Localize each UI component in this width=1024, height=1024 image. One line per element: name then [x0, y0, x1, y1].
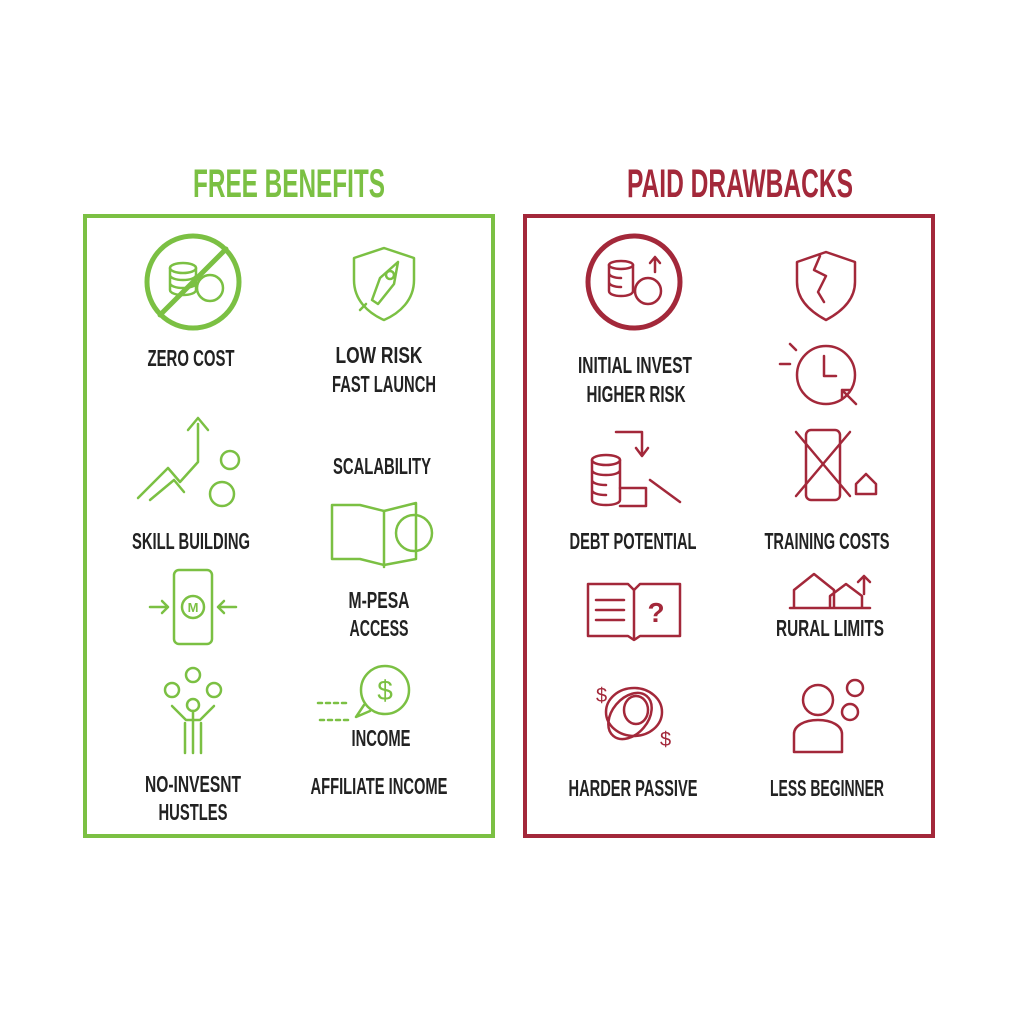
label: affiliate income: AFFILIATE INCOME [310, 773, 448, 799]
icon: juggler [165, 668, 221, 753]
icon: book brain [332, 503, 432, 567]
panel: paid drawbacks: HIGHER RISK [586, 381, 686, 407]
icon: scribble: $ [596, 685, 607, 707]
label: debt potential: DEBT POTENTIAL [570, 528, 696, 554]
panel: free benefits [85, 216, 493, 836]
icon: shield rocket [354, 248, 414, 320]
label: scalability: SCALABILITY [333, 453, 431, 479]
panel: paid drawbacks [525, 216, 933, 836]
panel: free benefits: FAST LAUNCH [332, 371, 436, 397]
label: no-invesnt hustles: NO-INVESNT [145, 771, 241, 797]
icon: scribble: $ [660, 729, 671, 751]
label: m-pesa access: M-PESA [348, 587, 410, 613]
icon: zero cost [147, 236, 239, 328]
icon: cracked shield [797, 252, 855, 320]
icon: initial invest [588, 236, 680, 328]
icon: rural houses [790, 574, 870, 608]
label: initial invest higher risk: INITIAL INVEST [578, 352, 692, 378]
title: free benefits: FREE BENEFITS [193, 162, 385, 206]
label: income: INCOME [352, 725, 410, 751]
icon: book question: ? [647, 597, 665, 628]
icon: scribble [596, 685, 671, 751]
label: rural limits: RURAL LIMITS [776, 615, 884, 641]
icon: debt chain [592, 432, 680, 506]
title: paid drawbacks: PAID DRAWBACKS [627, 162, 853, 206]
panel: free benefits: HUSTLES [158, 799, 228, 825]
panel: free benefits: ACCESS [350, 615, 408, 641]
label: low risk fast launch: LOW RISK [336, 342, 423, 368]
icon: dollar bubble: $ [377, 675, 393, 706]
icon: dollar bubble [318, 666, 409, 720]
icon: book question [588, 584, 680, 640]
label: training costs: TRAINING COSTS [764, 528, 890, 554]
icon: person gears [794, 680, 863, 752]
icon: crossed phone house [796, 430, 876, 500]
icon: clock [780, 344, 856, 404]
label: zero cost: ZERO COST [148, 345, 234, 371]
label: harder passive: HARDER PASSIVE [568, 775, 698, 801]
icon: phone M [150, 570, 236, 644]
label: less beginner: LESS BEGINNER [770, 775, 884, 801]
icon: phone M: M [188, 600, 198, 615]
label: skill building: SKILL BUILDING [132, 528, 250, 554]
icon: arrow gears [138, 418, 239, 506]
